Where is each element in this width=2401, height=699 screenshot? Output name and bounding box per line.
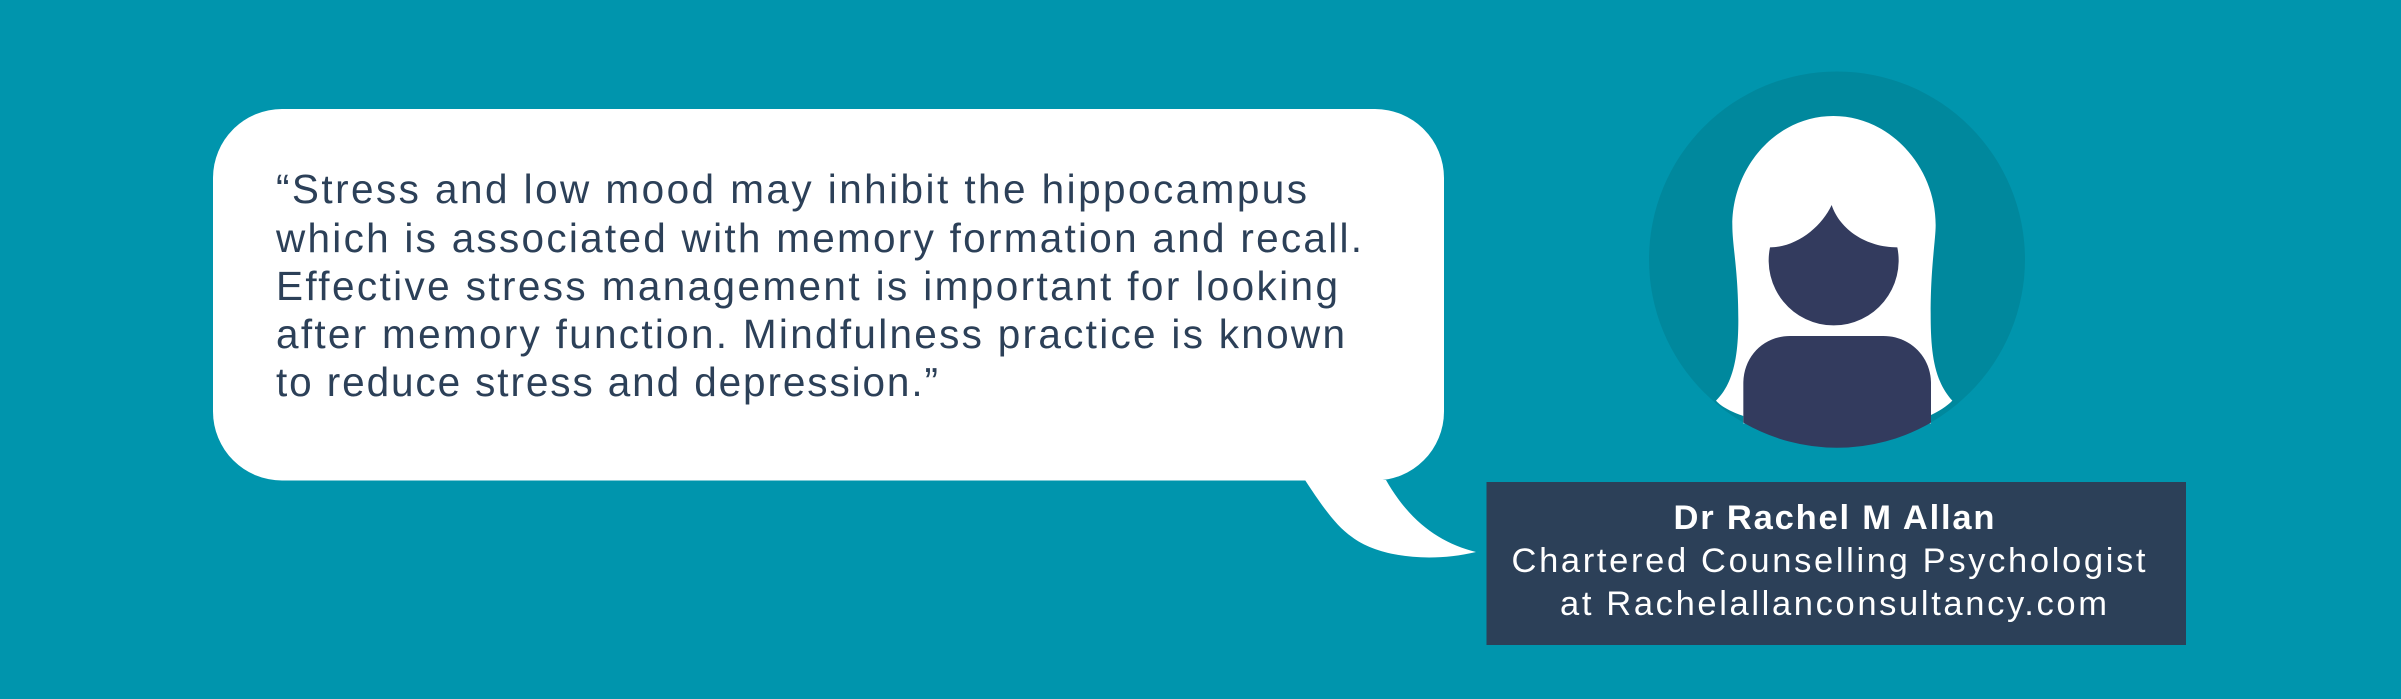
quote text: to reduce stress and depression.” (276, 359, 938, 405)
quote text (275, 166, 1362, 405)
quote text: which is associated with memory formation and recall. (275, 215, 1362, 261)
quote text: Effective stress management is important for looking (276, 263, 1338, 309)
panel: attribution box (1486, 482, 2186, 645)
icon: woman avatar (1649, 72, 2025, 448)
speech bubble shape (213, 109, 1476, 557)
attribution name: Dr Rachel M Allan (1674, 499, 1994, 537)
quote text: after memory function. Mindfulness practice is known (276, 311, 1345, 357)
attribution role: Chartered Counselling Psychologist (1512, 542, 2146, 580)
quote text: “Stress and low mood may inhibit the hippocampus (276, 166, 1307, 212)
attribution website: at Rachelallanconsultancy.com (1560, 585, 2107, 623)
panel: speech bubble with quote (213, 109, 1476, 557)
